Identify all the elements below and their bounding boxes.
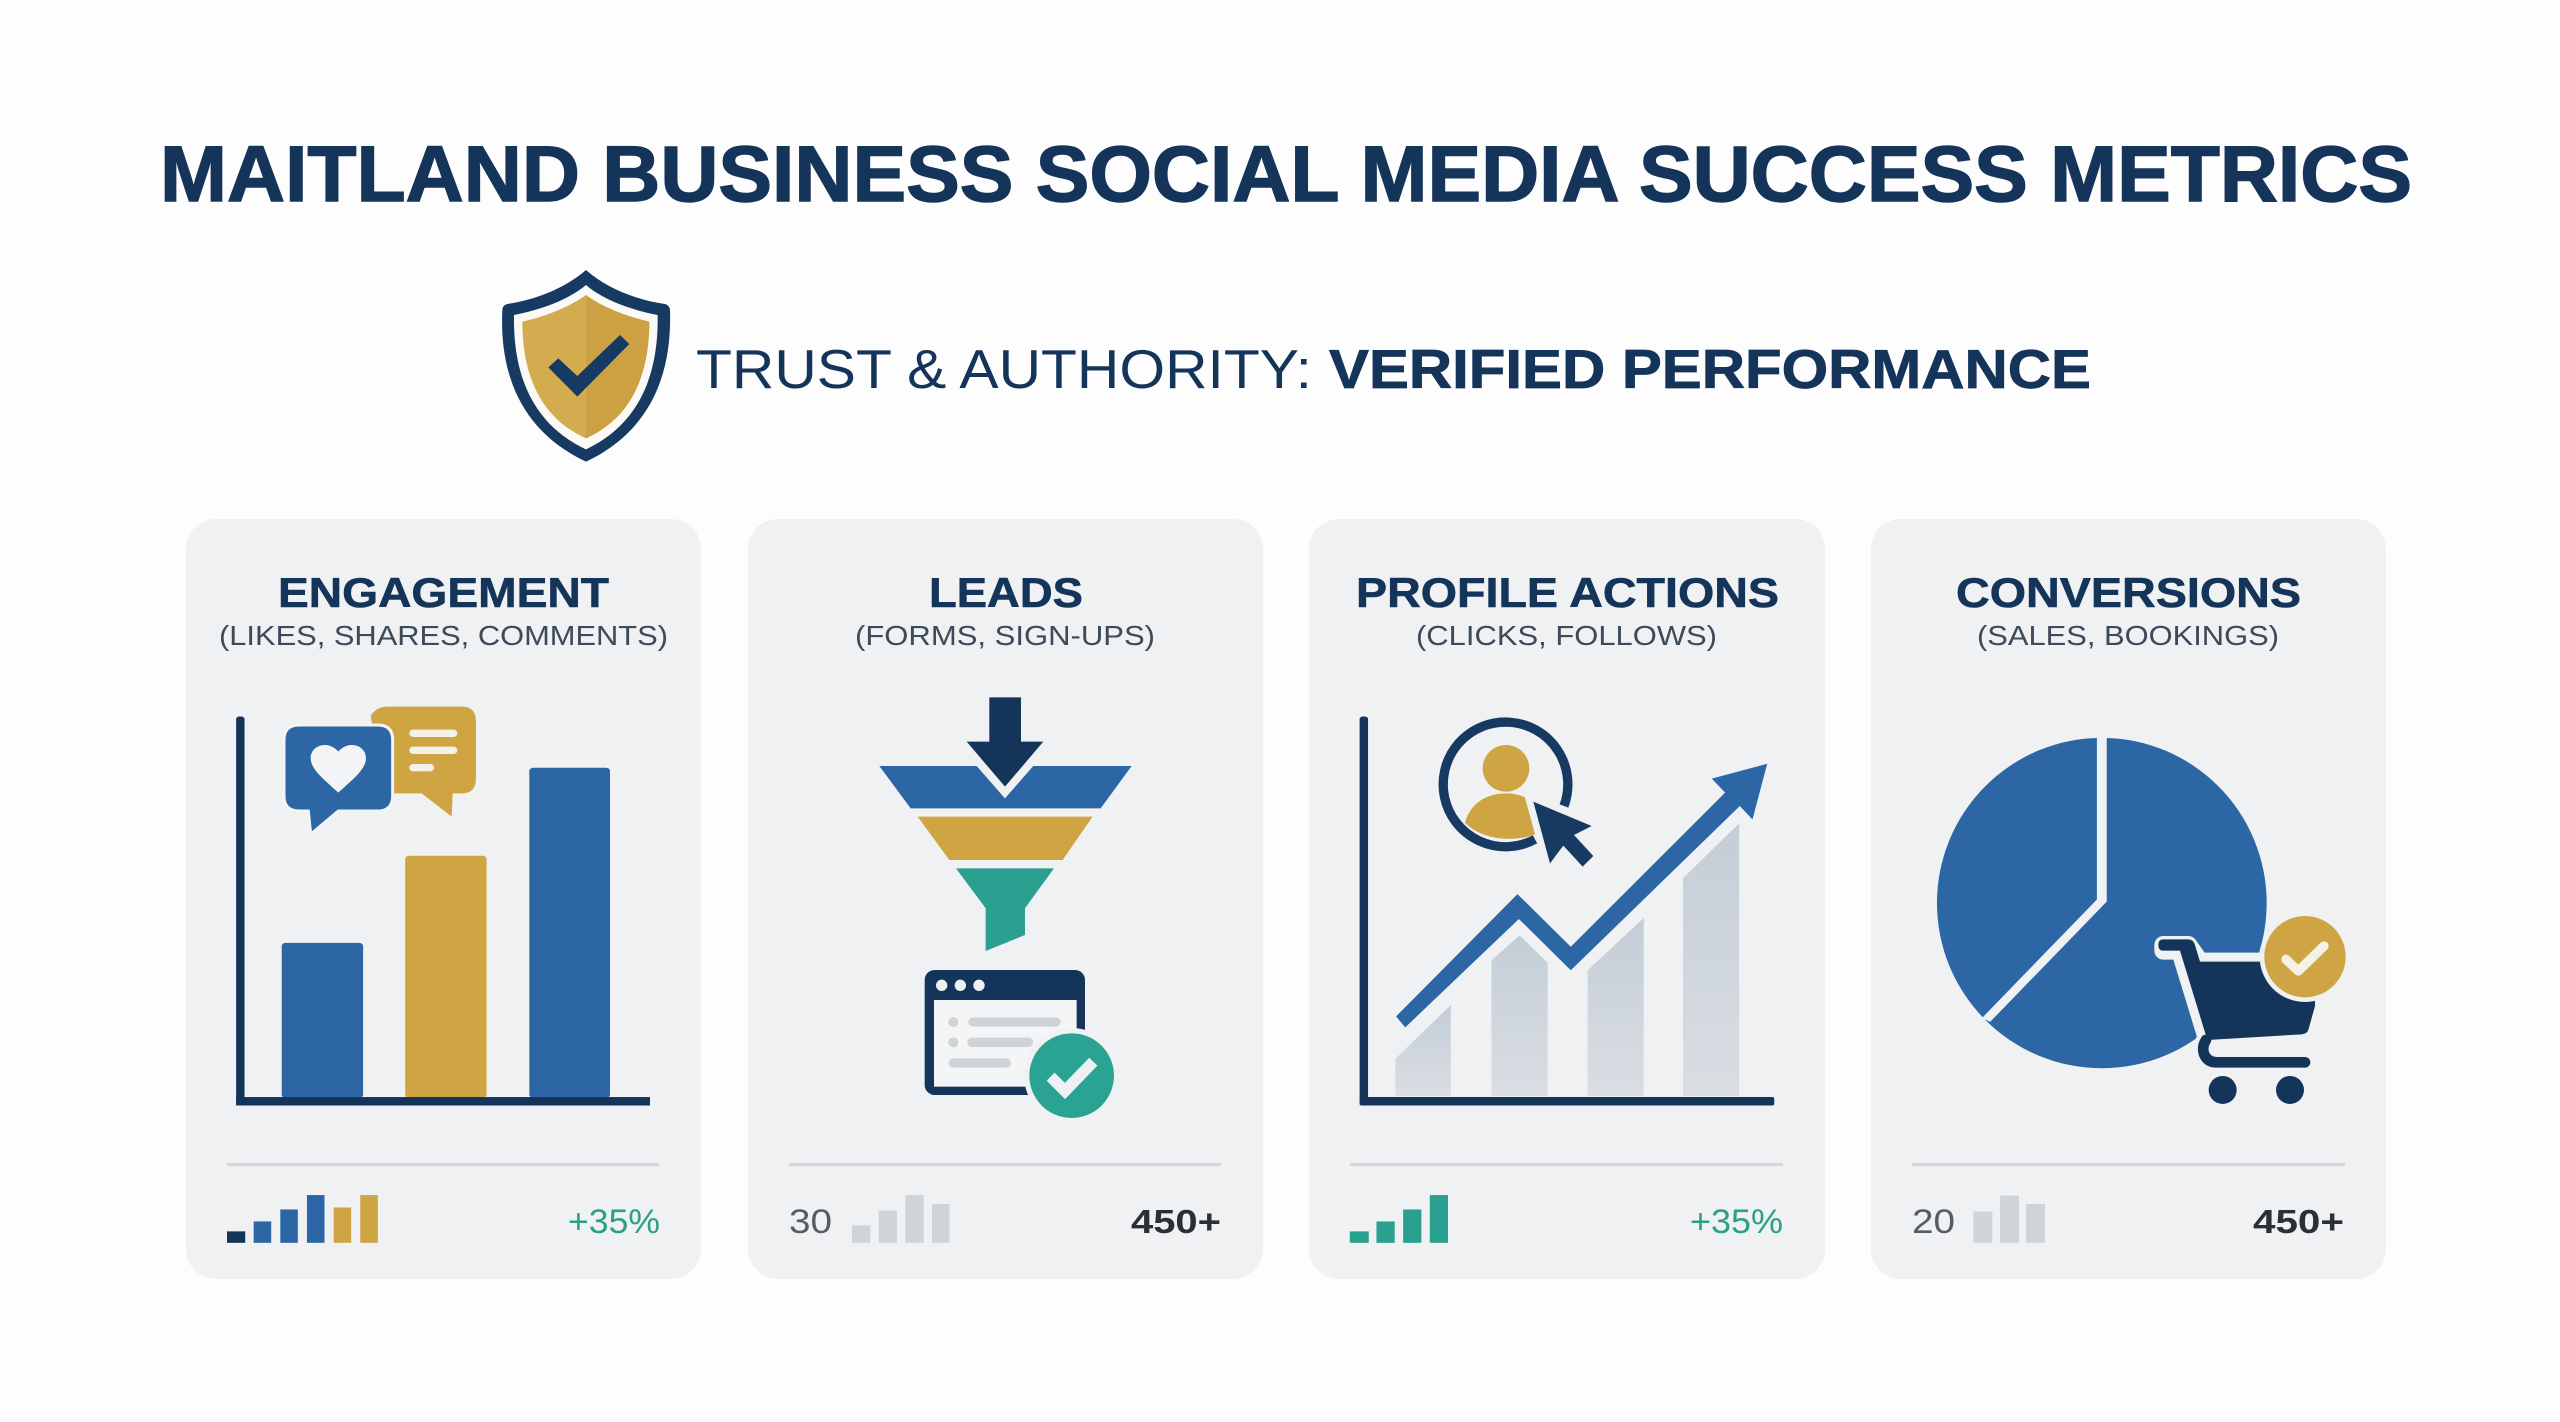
subtitle: TRUST & AUTHORITY:: [696, 338, 1312, 400]
subheading: (LIKES, SHARES, COMMENTS): [219, 620, 668, 651]
card background: [748, 519, 1263, 1279]
icon: form window with check: [925, 970, 1119, 1123]
panel: profile actions: [1309, 519, 1825, 1279]
value: end: 450+: [1131, 1203, 1221, 1240]
mini bars: [227, 1195, 378, 1243]
value: +35%: [568, 1203, 660, 1241]
icon: shield with check: [502, 270, 670, 462]
title: MAITLAND BUSINESS SOCIAL MEDIA SUCCESS METRICS: [160, 129, 2412, 218]
card background: [1871, 519, 2386, 1279]
panel: engagement: [186, 519, 701, 1279]
panel: conversions: [1871, 519, 2386, 1279]
pie chart: [1937, 734, 2267, 1068]
value: end: 450+: [2253, 1203, 2344, 1240]
icon: speech bubbles: [284, 707, 476, 834]
card background: [186, 519, 701, 1279]
subtitle: VERIFIED PERFORMANCE: [1329, 338, 2091, 400]
mini bars: [1350, 1195, 1448, 1243]
icon: profile with cursor: [1443, 722, 1593, 867]
divider: [789, 1163, 1221, 1166]
card background: [1309, 519, 1825, 1279]
subtitle: [696, 338, 2091, 400]
value: start: 30: [789, 1203, 832, 1241]
bar chart: [236, 716, 650, 1106]
panel: leads: [748, 519, 1263, 1279]
heading: ENGAGEMENT: [278, 569, 609, 616]
subheading: (SALES, BOOKINGS): [1977, 620, 2279, 651]
divider: [1350, 1163, 1783, 1166]
heading: CONVERSIONS: [1956, 569, 2301, 616]
subheading: (CLICKS, FOLLOWS): [1416, 620, 1717, 651]
heading: LEADS: [929, 569, 1083, 616]
heading: PROFILE ACTIONS: [1356, 569, 1779, 616]
value: start: 20: [1912, 1203, 1955, 1241]
divider: [227, 1163, 659, 1166]
value: +35%: [1690, 1203, 1783, 1241]
mini bars: [1973, 1196, 2045, 1243]
icon: shopping cart with check: [2158, 911, 2350, 1104]
mini bars: [852, 1195, 950, 1243]
subheading: (FORMS, SIGN-UPS): [855, 620, 1155, 651]
divider: [1912, 1163, 2345, 1166]
icon: funnel with arrow: [879, 697, 1132, 951]
growth chart: [1360, 716, 1774, 1106]
